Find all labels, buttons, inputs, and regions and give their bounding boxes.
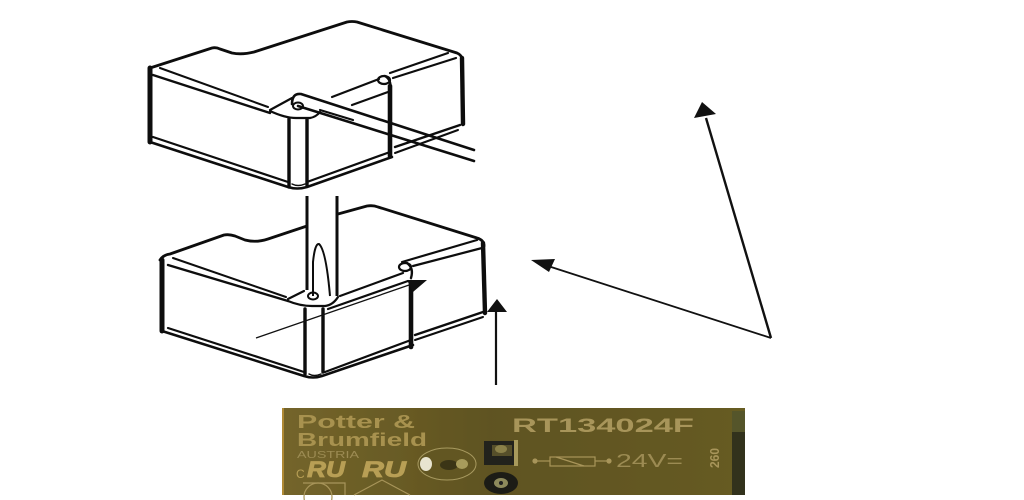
label text: approval marks xyxy=(296,457,408,482)
label text: approval marks: RU xyxy=(362,457,408,482)
label text: manufacturer xyxy=(297,412,427,450)
label text: voltage: 24V= xyxy=(616,451,683,471)
label icon: rivet xyxy=(418,448,476,480)
label text: approval marks: RU xyxy=(307,457,346,482)
label text: part number: RT134024F xyxy=(512,416,694,437)
photo: relay label xyxy=(282,408,745,500)
label icon: terminal round xyxy=(484,472,518,494)
arrow: pointer to lower relay side xyxy=(531,259,771,338)
label icon: terminal square xyxy=(484,440,518,466)
label text: approval marks: C xyxy=(296,467,305,481)
arrow: pointer to upper right xyxy=(694,102,771,338)
illustration: upper relay with probe xyxy=(150,22,474,188)
label text: batch code: 260 xyxy=(707,448,722,468)
label icon: approval outlines xyxy=(303,480,410,500)
arrow: vertical pointer to relay corner xyxy=(487,299,507,385)
arrow: pointer into relay body xyxy=(256,280,427,338)
label text: country: AUSTRIA xyxy=(297,449,359,461)
label text: manufacturer: Potter & xyxy=(297,412,415,432)
label icon: coil symbol xyxy=(533,457,611,466)
label text: manufacturer: Brumfield xyxy=(297,430,427,450)
illustration: probe shaft xyxy=(307,196,337,296)
illustration: lower relay xyxy=(160,206,485,378)
